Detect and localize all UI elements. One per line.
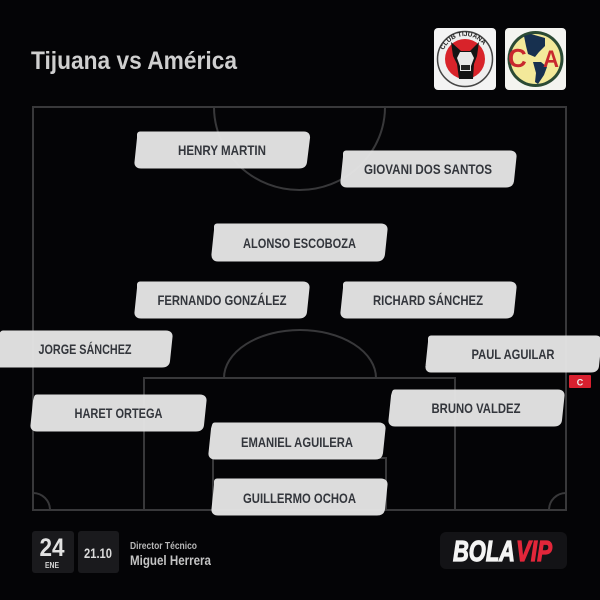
- icon: Club América crest: C: [508, 43, 527, 73]
- logo: Bolavip: [440, 532, 567, 569]
- icon: Club Tijuana crest: CLUB TIJUANA: [440, 32, 486, 50]
- title: Tijuana vs América: [31, 47, 238, 75]
- captain badge: [569, 375, 591, 388]
- player: Bruno Valdez: BRUNO VALDEZ: [432, 400, 521, 416]
- logo: Bolavip: VIP: [516, 536, 553, 568]
- player: Paul Aguilar: [428, 338, 599, 370]
- coach name: Miguel Herrera: [130, 553, 211, 568]
- player: Alonso Escoboza: ALONSO ESCOBOZA: [243, 235, 356, 251]
- player: Henry Martin: HENRY MARTIN: [178, 142, 266, 158]
- player: Fernando González: [137, 284, 307, 316]
- player: Richard Sánchez: RICHARD SÁNCHEZ: [373, 292, 483, 308]
- player: Haret Ortega: [33, 398, 204, 428]
- icon: Club América crest: [505, 28, 566, 90]
- time box: 21.10: [84, 545, 112, 561]
- date box: 24: [40, 534, 65, 562]
- player: Alonso Escoboza: [214, 226, 385, 258]
- pitch lines: [33, 107, 566, 510]
- player: Jorge Sánchez: JORGE SÁNCHEZ: [38, 341, 132, 357]
- player: Paul Aguilar: PAUL AGUILAR: [472, 346, 554, 362]
- icon: Club Tijuana crest: [434, 28, 496, 90]
- player: Haret Ortega: HARET ORTEGA: [74, 405, 162, 421]
- logo: Bolavip: BOLA: [453, 536, 515, 568]
- date box: ENE: [45, 561, 60, 570]
- player: Henry Martin: [137, 134, 307, 166]
- player: Giovani Dos Santos: [343, 154, 514, 184]
- captain badge: C: [577, 378, 584, 388]
- player: Fernando González: FERNANDO GONZÁLEZ: [158, 292, 287, 308]
- player: Emaniel Aguilera: EMANIEL AGUILERA: [241, 434, 353, 450]
- coach label: Director Técnico: [130, 540, 197, 552]
- player: Guillermo Ochoa: GUILLERMO OCHOA: [243, 490, 356, 506]
- player: Bruno Valdez: [391, 392, 562, 424]
- player: Guillermo Ochoa: [214, 482, 385, 512]
- time box: [78, 531, 119, 573]
- player: Emaniel Aguilera: [211, 426, 383, 456]
- icon: Club América crest: A: [543, 46, 559, 73]
- player: Richard Sánchez: [343, 284, 514, 316]
- date box: [32, 531, 74, 573]
- player: Jorge Sánchez: [0, 334, 170, 364]
- player: Giovani Dos Santos: GIOVANI DOS SANTOS: [364, 161, 492, 177]
